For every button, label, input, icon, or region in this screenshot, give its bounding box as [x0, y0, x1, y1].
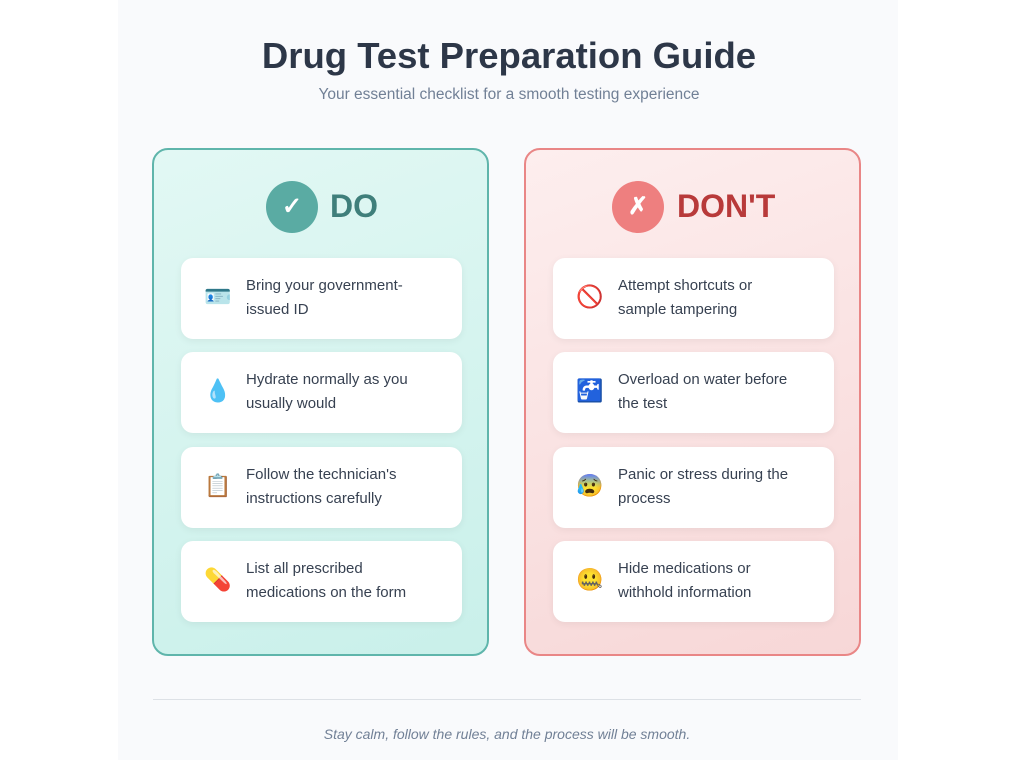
heading: dont: DON'T [677, 188, 775, 224]
card: water: Overload on water before the test [618, 371, 787, 412]
icon: x circle: ✗ [628, 193, 648, 220]
heading: do: DO [330, 188, 378, 224]
icon: check circle [266, 181, 318, 233]
card: panic [553, 447, 834, 528]
card: hydrate [181, 352, 462, 433]
card: panic: Panic or stress during the process [618, 466, 788, 507]
card: medications: List all prescribed medications on the form [246, 560, 406, 601]
card: panic: 😰 [576, 474, 604, 499]
card: shortcuts: 🚫 [576, 285, 604, 310]
card: water: 🚰 [576, 379, 604, 404]
card: instructions: 📋 [204, 474, 232, 499]
icon: check circle: ✓ [282, 193, 302, 220]
card: medications: 💊 [204, 568, 232, 593]
card: id: Bring your government-issued ID [246, 277, 403, 318]
card: medications [181, 541, 462, 622]
icon: x circle [612, 181, 664, 233]
panel: do [152, 148, 489, 656]
card: hydrate: 💧 [204, 379, 232, 404]
subtitle: Your essential checklist for a smooth testing experience [318, 86, 700, 103]
card: hydrate: Hydrate normally as you usually would [246, 371, 408, 412]
card: instructions: Follow the technician's instructions carefully [246, 466, 396, 507]
card: hide: 🤐 [576, 568, 604, 593]
card: shortcuts: Attempt shortcuts or sample tampering [618, 277, 752, 318]
card: hide [553, 541, 834, 622]
card: shortcuts [553, 258, 834, 339]
panel: dont [524, 148, 861, 656]
card: id: 🪪 [204, 285, 232, 310]
card: water [553, 352, 834, 433]
footer: Stay calm, follow the rules, and the process will be smooth. [324, 726, 690, 742]
card: id [181, 258, 462, 339]
card: hide: Hide medications or withhold information [618, 560, 751, 601]
title: Drug Test Preparation Guide [262, 35, 756, 76]
card: instructions [181, 447, 462, 528]
